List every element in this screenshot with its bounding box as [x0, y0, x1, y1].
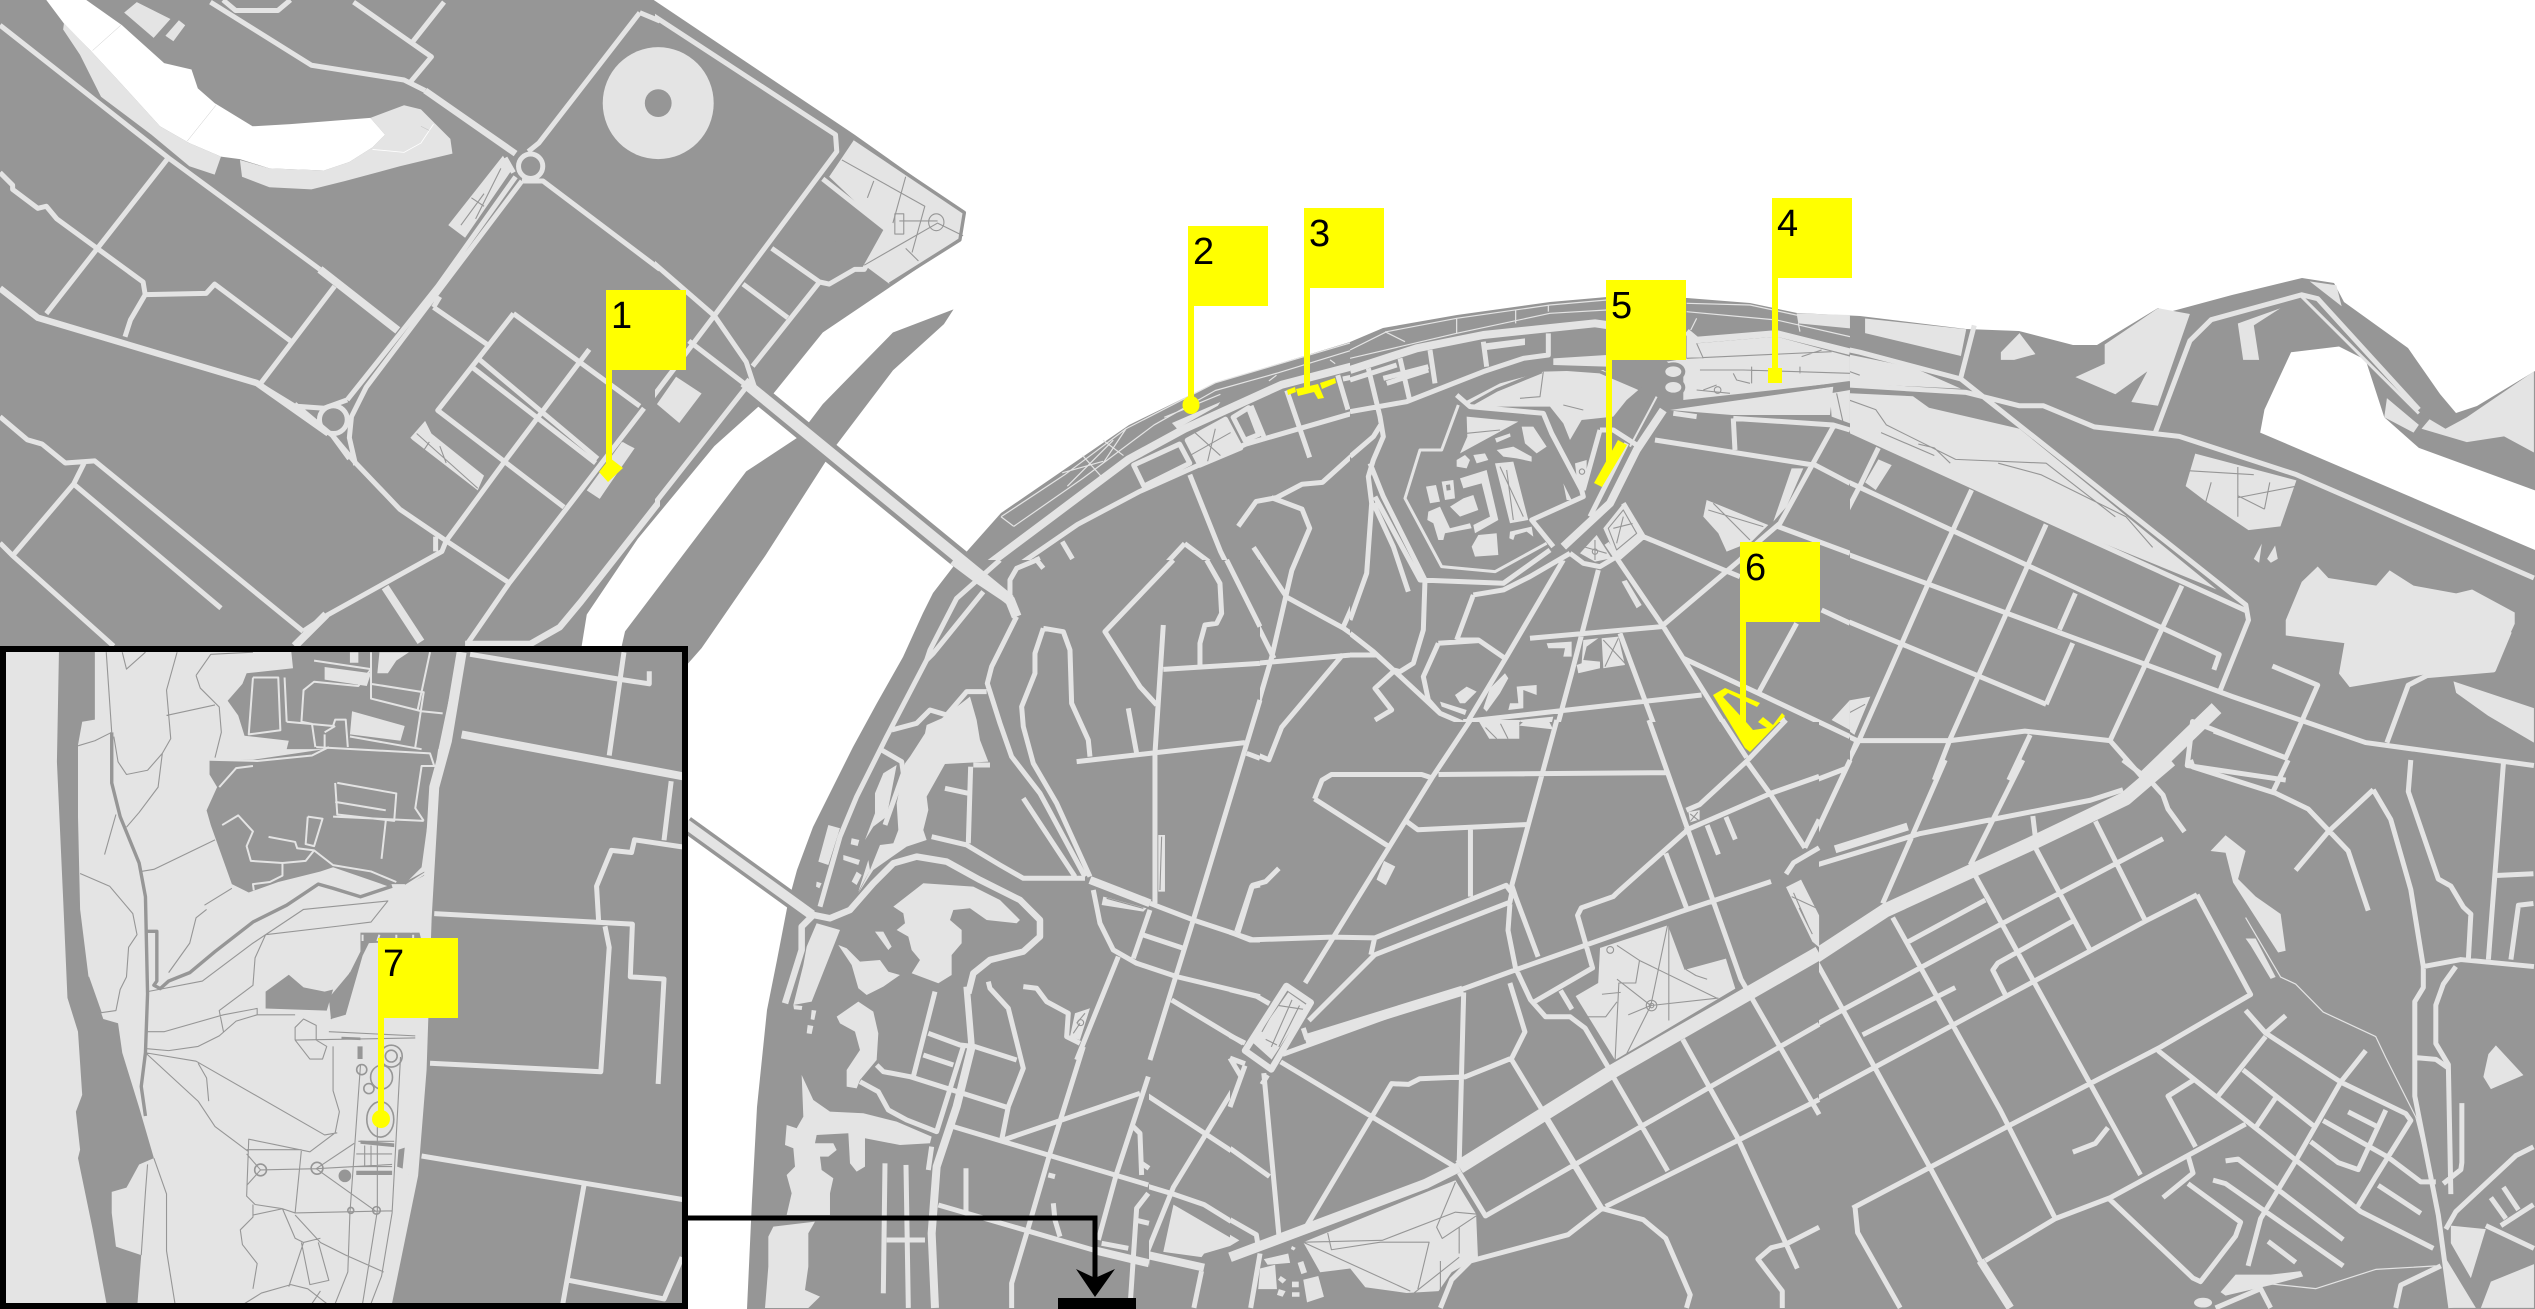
fortress district and central waterfront [1350, 300, 1850, 739]
park paths [1467, 344, 1850, 667]
south-east streets and canals [1750, 760, 2534, 1308]
flag 2: 2 [1193, 231, 1214, 273]
west lake [46, 0, 385, 170]
south parks [1230, 720, 1819, 1302]
small park paths [1073, 837, 1162, 1033]
flag 5: 5 [1611, 285, 1632, 327]
main bridge [686, 382, 1010, 915]
streets [1230, 720, 1819, 1308]
flag 2 [1182, 226, 1268, 414]
west bank of east city: lakes and streets [785, 560, 1260, 1060]
flag 7: 7 [383, 943, 404, 985]
north-east park paths [1850, 371, 2294, 713]
park paths [1253, 724, 1816, 1293]
connector arrow from inset [686, 1218, 1136, 1309]
fortress park and riverside lawns [1460, 313, 1850, 453]
streets [1350, 323, 1607, 370]
stadium [603, 47, 714, 159]
flag 3 [1287, 208, 1384, 399]
flag 4 [1768, 198, 1852, 383]
flag 6: 6 [1745, 547, 1766, 589]
flag 4: 4 [1777, 203, 1798, 245]
inset frame [3, 649, 685, 1306]
lower riverside parks [765, 1002, 932, 1308]
lower streets [860, 982, 1149, 1308]
south-west of east city: parks and streets [765, 982, 1149, 1309]
streets [953, 560, 1017, 617]
east west-bank parks [587, 139, 963, 499]
north-east water and parks [1850, 282, 2535, 782]
west roundabout [319, 406, 347, 434]
lower bridge [686, 824, 812, 915]
inset estate lanes [210, 652, 443, 941]
west city: stadium district [516, 14, 966, 502]
star district parks [1437, 468, 1850, 757]
thin stream [2246, 918, 2436, 1289]
inset park paths [78, 652, 415, 1304]
north waterfront and streets west of the fortress [988, 342, 1350, 762]
fortress buildings [1426, 427, 1587, 557]
central south: rotary, city park, forest park and streets [1230, 720, 1819, 1308]
lake shore parks [63, 2, 633, 499]
flag 6 [1713, 542, 1820, 752]
flag 7 [372, 938, 458, 1128]
west city land mass [0, 0, 964, 673]
rotary ring [1245, 986, 1311, 1069]
riverside parks and lakes [793, 697, 1165, 1040]
inset streets [422, 652, 700, 1304]
east city land mass [747, 278, 2535, 1309]
flag 1: 1 [611, 295, 632, 337]
north-east streets [1850, 292, 2535, 782]
double ring pavilion [1668, 362, 1686, 377]
waterfront thin lines [1350, 300, 1850, 358]
west streets [0, 0, 660, 646]
inset map [0, 646, 700, 1309]
west city: lake, parks and streets west of the stadium [0, 0, 660, 646]
arrow base bar [1058, 1298, 1136, 1309]
flag 3: 3 [1309, 213, 1330, 255]
inset monument circles [255, 1045, 402, 1214]
inset thick paths [112, 732, 426, 1116]
river island [615, 309, 954, 673]
inset river [57, 648, 154, 1309]
inset city blocks [392, 652, 682, 1303]
flag 5 [1594, 280, 1686, 487]
fortress wall [1405, 405, 1547, 572]
flag 1 [599, 290, 686, 482]
arrowhead [1076, 1269, 1115, 1297]
inset buildings [325, 652, 409, 741]
south centre, narrow strip [1149, 1090, 1230, 1308]
inset estate grounds [207, 648, 460, 1019]
west park paths [417, 168, 501, 488]
